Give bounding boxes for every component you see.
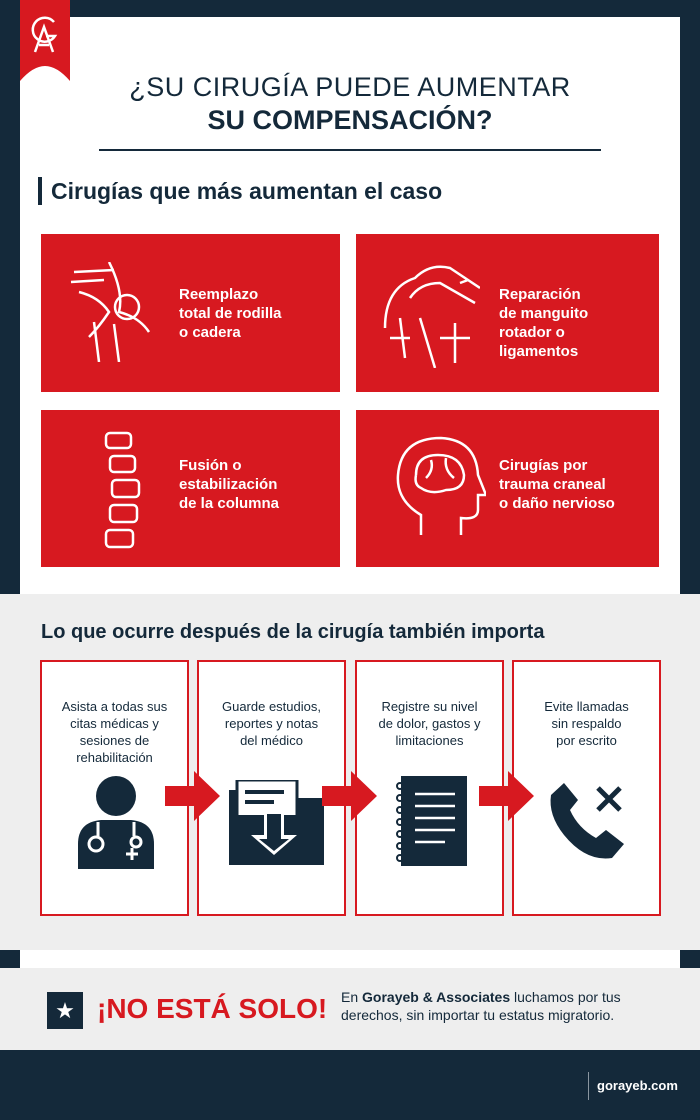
step 4	[512, 660, 661, 916]
card: shoulder: rotador o	[499, 324, 565, 341]
logo ribbon	[20, 0, 70, 81]
title: ¿SU CIRUGÍA PUEDE AUMENTAR	[129, 72, 571, 102]
slogan: ¡NO ESTÁ SOLO!	[97, 993, 327, 1024]
arrow 2	[322, 771, 377, 821]
step 4: sin respaldo	[551, 716, 622, 731]
icon: star box	[47, 992, 83, 1029]
card: brain: Cirugías por	[499, 457, 587, 474]
text block: derechos, sin importar tu estatus migratorio.	[341, 1007, 614, 1023]
card: knee: total de rodilla	[179, 305, 282, 322]
card: knee: Reemplazo	[179, 286, 258, 303]
section heading: after surgery: Lo que ocurre después de la cirugía también importa	[41, 621, 544, 643]
arrow 1	[165, 771, 220, 821]
icon: head brain	[396, 436, 486, 535]
card: spine: de la columna	[179, 495, 279, 512]
card: spine: Fusión o	[179, 457, 242, 474]
card: shoulder	[356, 234, 659, 392]
white top panel	[20, 17, 680, 594]
title: SU COMPENSACIÓN?	[207, 105, 493, 135]
icon: notepad	[396, 776, 467, 866]
bottom banner	[0, 968, 700, 1050]
step 1	[40, 660, 189, 916]
icon: star box: ★	[55, 998, 75, 1023]
footer url: gorayeb.com	[597, 1078, 678, 1093]
step 3: limitaciones	[396, 733, 463, 748]
icon: knee	[70, 262, 150, 362]
step 1: sesiones de	[80, 733, 149, 748]
step 4: por escrito	[556, 733, 617, 748]
step 3: de dolor, gastos y	[379, 716, 480, 731]
text block	[341, 989, 621, 1023]
card: shoulder: ligamentos	[499, 343, 578, 360]
card: shoulder: de manguito	[499, 305, 588, 322]
arrow 3	[479, 771, 534, 821]
step 2	[197, 660, 346, 916]
step 2: del médico	[240, 733, 303, 748]
card: brain: o daño nervioso	[499, 495, 615, 512]
card: knee: o cadera	[179, 324, 241, 341]
step 2: Guarde estudios,	[222, 699, 321, 714]
step 1: Asista a todas sus	[62, 699, 167, 714]
gray section	[0, 594, 700, 950]
icon: doctor	[78, 776, 154, 869]
text block: En Gorayeb & Associates luchamos por tus	[341, 989, 621, 1005]
step 1: citas médicas y	[70, 716, 159, 731]
card: brain	[356, 410, 659, 567]
section heading: surgeries: Cirugías que más aumentan el caso	[51, 178, 442, 204]
card: brain: trauma craneal	[499, 476, 606, 493]
icon: phone cancel	[550, 783, 624, 858]
title	[129, 72, 571, 135]
icon: shoulder	[384, 266, 480, 368]
card: knee	[41, 234, 340, 392]
white strip	[20, 950, 680, 968]
step 3: Registre su nivel	[381, 699, 478, 714]
step 1: rehabilitación	[76, 750, 153, 765]
step 4: Evite llamadas	[544, 699, 629, 714]
icon: spine	[104, 432, 140, 548]
card: spine	[41, 410, 340, 567]
card: shoulder: Reparación	[499, 286, 581, 303]
step 3	[355, 660, 504, 916]
card: spine: estabilización	[179, 476, 277, 493]
footer url	[588, 1072, 678, 1100]
icon: folder download	[229, 780, 324, 865]
step 2: reportes y notas	[225, 716, 318, 731]
